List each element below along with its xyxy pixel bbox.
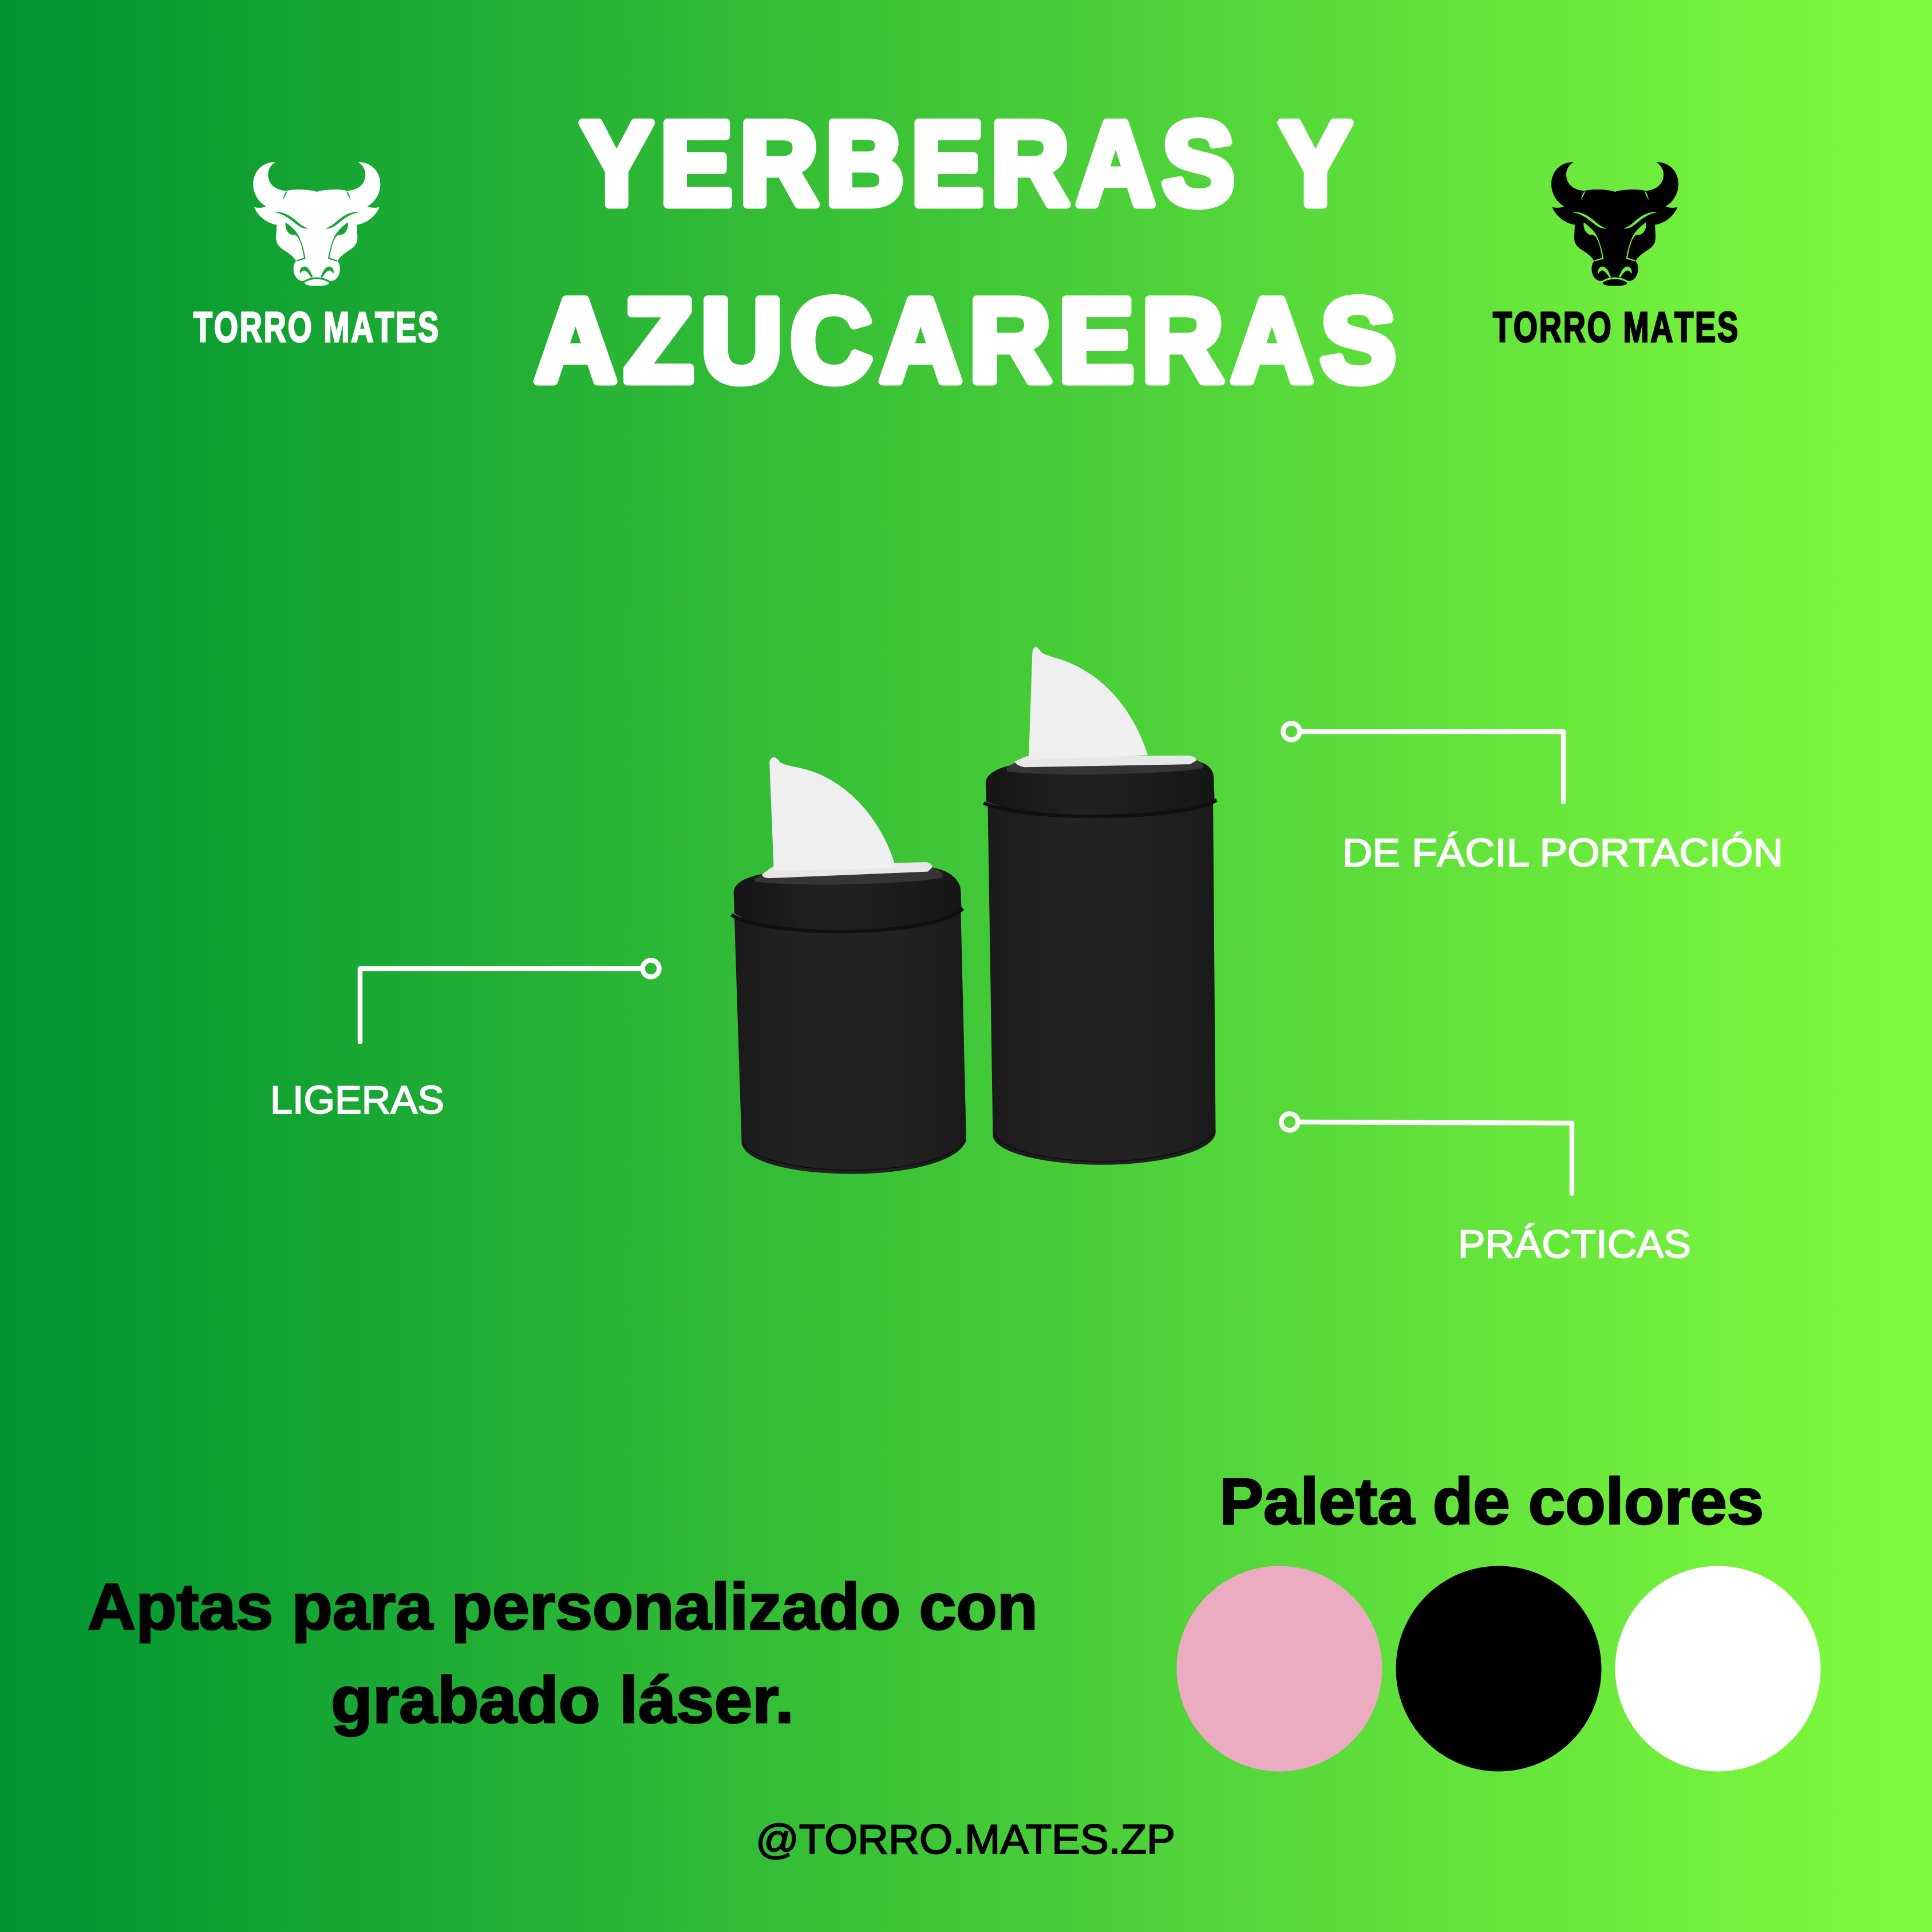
title: [535, 97, 1404, 406]
logo: white Torro Mates: [193, 162, 440, 351]
tall tin body: [988, 799, 1216, 1165]
tall tin lid top: [1006, 760, 1203, 775]
callout label: DE FÁCIL PORTACIÓN: [1342, 831, 1783, 875]
callout: de fácil portación: [1283, 724, 1783, 875]
tall tin scoop: [1029, 647, 1148, 760]
callout connector: [1283, 724, 1563, 802]
swatch: black: [1396, 1566, 1602, 1771]
callout label: LIGERAS: [270, 1078, 444, 1122]
logo wordmark white: TORRO MATES: [193, 303, 440, 351]
callout: ligeras: [270, 961, 659, 1122]
logo: black Torro Mates: [1493, 162, 1740, 351]
tall tin lid: [986, 760, 1215, 815]
text block: laser engraving note: [88, 1571, 1038, 1737]
small tin base edge: [742, 1137, 966, 1170]
small tin lid top: [755, 867, 943, 884]
title line 2: AZUCARERAS: [535, 274, 1404, 406]
product: two black tins with white scoops: [732, 647, 1216, 1174]
small tin scoop base plate: [762, 862, 933, 878]
swatch: white: [1615, 1566, 1820, 1771]
callout: prácticas: [1281, 1114, 1691, 1266]
note line 1: Aptas para personalizado con: [88, 1571, 1038, 1643]
palette heading: Paleta de colores: [1219, 1465, 1764, 1538]
icon: white bull head: [253, 162, 380, 286]
tall tin: [984, 647, 1216, 1165]
small tin: [732, 757, 966, 1174]
small tin rim: [732, 908, 963, 931]
title line 1: YERBERAS Y: [580, 97, 1359, 230]
social handle: @TORRO.MATES.ZP: [756, 1817, 1175, 1863]
tall tin base edge: [994, 1130, 1215, 1161]
callout connector: [1281, 1114, 1572, 1194]
small tin scoop: [769, 757, 896, 871]
callout label: PRÁCTICAS: [1458, 1222, 1691, 1266]
logo wordmark black: TORRO MATES: [1493, 303, 1740, 351]
icon: black bull head: [1551, 162, 1678, 286]
tall tin scoop base plate: [1015, 756, 1196, 767]
callout connector: [360, 961, 659, 1042]
small tin body: [734, 910, 966, 1174]
small tin lid: [734, 867, 962, 929]
note line 2: grabado láser.: [331, 1664, 794, 1737]
colour palette: [1177, 1465, 1820, 1771]
tall tin rim: [984, 800, 1216, 816]
swatch: pink: [1177, 1566, 1382, 1771]
